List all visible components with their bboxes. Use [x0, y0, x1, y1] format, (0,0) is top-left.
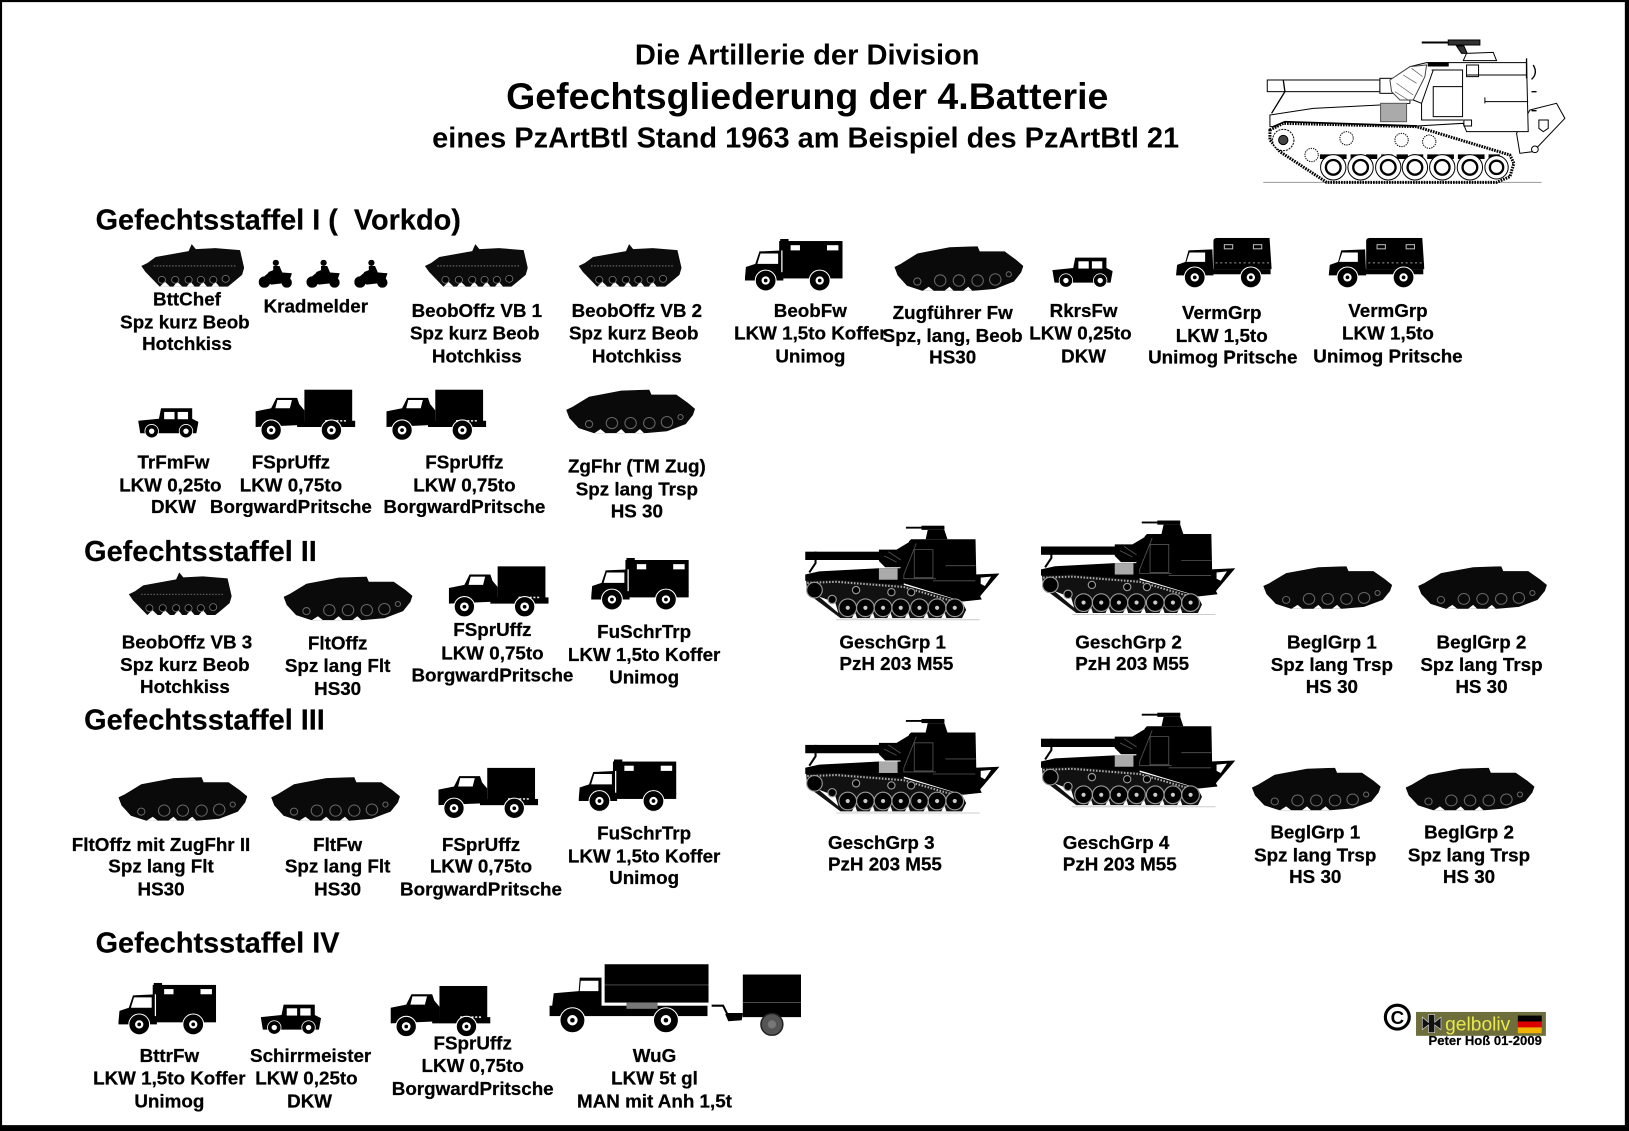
icon: jeep [138, 408, 198, 438]
icon: jeep [1052, 258, 1113, 287]
icon: short armoured carrier [425, 244, 528, 287]
label: FSprUffz [434, 1032, 512, 1053]
unit: GeschGrp 1 [805, 526, 999, 674]
label: Schirrmeister [250, 1045, 372, 1066]
unit: VermGrp 1 [1148, 238, 1297, 368]
label: LKW 0,25to [119, 474, 222, 495]
label: LKW 1,5to Koffer [734, 323, 887, 344]
unit: FltFw [271, 777, 400, 900]
unit: TrFmFw [119, 408, 222, 517]
icon: box truck [118, 983, 216, 1035]
label: GeschGrp 2 [1075, 631, 1182, 652]
unit: GeschGrp 3 [805, 719, 999, 875]
label: BttChef [153, 288, 222, 309]
unit: Zugführer Fw [883, 246, 1023, 368]
label: LKW 1,5to Koffer [93, 1068, 246, 1089]
icon: motorcycle 2 [306, 260, 340, 288]
label: GeschGrp 1 [839, 631, 946, 652]
unit: BeglGrp 1 [1263, 566, 1393, 697]
icon: cargo truck [391, 986, 490, 1037]
label: HS 30 [1289, 866, 1341, 887]
label: HS 30 [1306, 676, 1358, 697]
label: PzH 203 M55 [839, 653, 953, 674]
unit: VermGrp 2 [1313, 238, 1463, 367]
label: Spz lang Trsp [1420, 654, 1543, 675]
label: FSprUffz [252, 452, 330, 473]
unit: BeglGrp 2 [1418, 566, 1547, 697]
label: HS 30 [611, 500, 663, 521]
label: Unimog Pritsche [1148, 347, 1297, 368]
label: LKW 1,5to [1342, 323, 1434, 344]
label: Hotchkiss [140, 676, 230, 697]
label: FuSchrTrp [597, 621, 691, 642]
unit: BeglGrp 2 [1406, 768, 1534, 887]
label: Unimog [609, 667, 679, 688]
heading: Gefechtsstaffel I: Gefechtsstaffel I ( Vorkdo) [96, 205, 461, 237]
title line 2: Gefechtsgliederung der 4.Batterie [506, 75, 1108, 117]
label: Unimog [134, 1091, 204, 1112]
unit: Schirrmeister [250, 1005, 372, 1112]
icon: cargo truck [256, 390, 355, 440]
icon: cargo truck [449, 566, 549, 617]
unit: GeschGrp 2 [1041, 521, 1235, 674]
icon: long armoured carrier [271, 777, 400, 821]
label: BeglGrp 1 [1287, 631, 1377, 652]
label: Hotchkiss [432, 346, 522, 367]
icon: motorcycle 1 [259, 260, 292, 288]
label: FltFw [313, 834, 363, 855]
unit: ZgFhr (TM Zug) [566, 390, 706, 521]
label: Zugführer Fw [893, 302, 1013, 323]
icon: long armoured carrier [1252, 768, 1381, 810]
icon: short armoured carrier [129, 572, 232, 615]
label: PzH 203 M55 [1075, 653, 1189, 674]
label: Spz lang Flt [285, 655, 391, 676]
unit: Kradmelder [259, 260, 388, 317]
label: FuSchrTrp [597, 822, 691, 843]
label: LKW 5t gl [611, 1068, 698, 1089]
label: LKW 0,75to [430, 856, 532, 877]
label: Spz kurz Beob [569, 323, 698, 344]
label: HS 30 [1455, 676, 1508, 697]
author credit: Peter Hoß 01-2009 [1428, 1033, 1542, 1048]
label: BeglGrp 1 [1270, 821, 1360, 842]
label: BeobOffz VB 2 [572, 300, 702, 321]
unit: BttChef [120, 244, 250, 354]
icon: long armoured carrier [1418, 566, 1547, 609]
label: Spz lang Trsp [1254, 844, 1376, 865]
label: RkrsFw [1050, 300, 1118, 321]
icon: motorcycle 3 [354, 260, 388, 288]
icon: long armoured carrier [1406, 768, 1534, 810]
icon: long armoured carrier [284, 577, 412, 620]
label: DKW [151, 496, 196, 517]
unit: FltOffz [284, 577, 412, 699]
unit: FSprUffz [400, 768, 562, 900]
label: LKW 0,25to [255, 1068, 358, 1089]
label: BorgwardPritsche [383, 496, 545, 517]
label: Unimog [775, 346, 845, 367]
icon: iron cross [1422, 1015, 1441, 1033]
label: LKW 0,75to [422, 1055, 524, 1076]
label: Spz lang Trsp [576, 479, 698, 500]
icon: box truck [591, 558, 689, 610]
label: PzH 203 M55 [1063, 854, 1177, 875]
label: Kradmelder [264, 296, 369, 317]
label: DKW [287, 1091, 332, 1112]
label: VermGrp [1182, 302, 1261, 323]
unit: RkrsFw [1029, 258, 1132, 367]
icon: jeep [261, 1005, 321, 1034]
logo wordmark: gelboliv [1445, 1015, 1511, 1036]
unit: FSprUffz [210, 390, 372, 517]
icon: cargo truck [438, 768, 538, 818]
icon: howitzer silhouette [805, 526, 999, 620]
label: BorgwardPritsche [210, 496, 372, 517]
label: HS30 [314, 678, 361, 699]
icon: tarp truck [1329, 238, 1424, 288]
label: LKW 0,75to [413, 474, 516, 495]
label: Spz lang Trsp [1408, 844, 1530, 865]
unit: GeschGrp 4 [1041, 713, 1235, 875]
heading: Gefechtsstaffel III: Gefechtsstaffel III [84, 704, 325, 736]
unit: FltOffz mit ZugFhr II [72, 777, 250, 900]
label: Spz lang Trsp [1271, 654, 1393, 675]
label: PzH 203 M55 [828, 854, 942, 875]
unit: BttrFw [93, 983, 246, 1112]
label: Spz kurz Beob [120, 654, 250, 675]
label: WuG [633, 1045, 676, 1066]
icon: tarp truck [1176, 238, 1272, 288]
label: BttrFw [140, 1045, 199, 1066]
label: VermGrp [1348, 300, 1428, 321]
icon: cargo truck [386, 390, 486, 440]
label: Unimog [609, 867, 679, 888]
label: LKW 1,5to [1176, 325, 1268, 346]
label: BeglGrp 2 [1437, 631, 1526, 652]
heading: Gefechtsstaffel II: Gefechtsstaffel II [84, 536, 317, 568]
icon: German flag [1518, 1016, 1542, 1033]
label: HS30 [929, 347, 976, 368]
label: LKW 1,5to Koffer [568, 845, 721, 866]
icon: box truck [579, 759, 676, 811]
icon: short armoured carrier [579, 244, 682, 287]
copyright logo [1385, 1005, 1546, 1048]
label: HS30 [138, 879, 185, 900]
label: FSprUffz [425, 452, 504, 473]
unit: BeglGrp 1 [1252, 768, 1381, 887]
icon: howitzer silhouette [1041, 521, 1235, 615]
heading: Gefechtsstaffel IV: Gefechtsstaffel IV [96, 928, 340, 960]
label: FSprUffz [442, 834, 520, 855]
label: Hotchkiss [592, 346, 682, 367]
label: FltOffz mit ZugFhr II [72, 834, 250, 855]
label: GeschGrp 3 [828, 832, 935, 853]
unit: FSprUffz [383, 390, 545, 517]
icon: long armoured carrier [1263, 566, 1392, 609]
label: Unimog Pritsche [1313, 346, 1463, 367]
title block [432, 39, 1179, 155]
label: Spz, lang, Beob [883, 325, 1023, 346]
icon: copyright [1385, 1005, 1409, 1029]
unit: WuG [550, 964, 801, 1112]
icon: short armoured carrier [141, 244, 244, 287]
label: BeglGrp 2 [1424, 821, 1514, 842]
title line 1: Die Artillerie der Division [635, 39, 980, 71]
label: MAN mit Anh 1,5t [577, 1091, 733, 1112]
label: Spz kurz Beob [410, 323, 540, 344]
label: BeobOffz VB 1 [412, 300, 542, 321]
icon: long armoured carrier [118, 777, 247, 821]
label: FSprUffz [453, 619, 532, 640]
label: LKW 1,5to Koffer [568, 644, 721, 665]
label: BorgwardPritsche [411, 665, 573, 686]
label: Spz kurz Beob [120, 311, 250, 332]
unit: BeobOffz VB 2 [569, 244, 702, 367]
unit: FSprUffz [391, 986, 554, 1099]
icon: truck with trailer [550, 964, 801, 1035]
icon: box truck [745, 239, 843, 291]
label: BeobFw [774, 300, 847, 321]
icon: howitzer silhouette [805, 719, 999, 813]
label: LKW 0,75to [441, 643, 544, 664]
icon: long armoured carrier [894, 246, 1023, 291]
label: GeschGrp 4 [1063, 832, 1170, 853]
label: TrFmFw [137, 452, 210, 473]
icon: long armoured carrier [566, 390, 695, 433]
label: Hotchkiss [142, 333, 232, 354]
label: LKW 0,75to [240, 474, 342, 495]
illustration: self-propelled howitzer line drawing [1263, 40, 1565, 182]
title line 3: eines PzArtBtl Stand 1963 am Beispiel des PzArtBtl 21 [432, 123, 1179, 155]
unit: BeobOffz VB 3 [120, 572, 252, 697]
label: BorgwardPritsche [392, 1078, 554, 1099]
icon: howitzer silhouette [1041, 713, 1235, 807]
label: BeobOffz VB 3 [122, 631, 252, 652]
unit: FuSchrTrp [568, 759, 721, 888]
label: FltOffz [308, 632, 367, 653]
unit: BeobFw [734, 239, 887, 367]
label: Spz lang Flt [285, 856, 391, 877]
label: ZgFhr (TM Zug) [568, 456, 706, 477]
label: LKW 0,25to [1029, 323, 1132, 344]
unit: FuSchrTrp [568, 558, 721, 688]
label: HS30 [314, 879, 361, 900]
label: DKW [1061, 346, 1106, 367]
logo banner [1416, 1012, 1546, 1036]
label: BorgwardPritsche [400, 879, 562, 900]
label: HS 30 [1443, 866, 1495, 887]
icon: copyright: C [1391, 1007, 1404, 1028]
label: Spz lang Flt [108, 856, 215, 877]
unit: FSprUffz [411, 566, 573, 686]
unit: BeobOffz VB 1 [410, 244, 542, 367]
